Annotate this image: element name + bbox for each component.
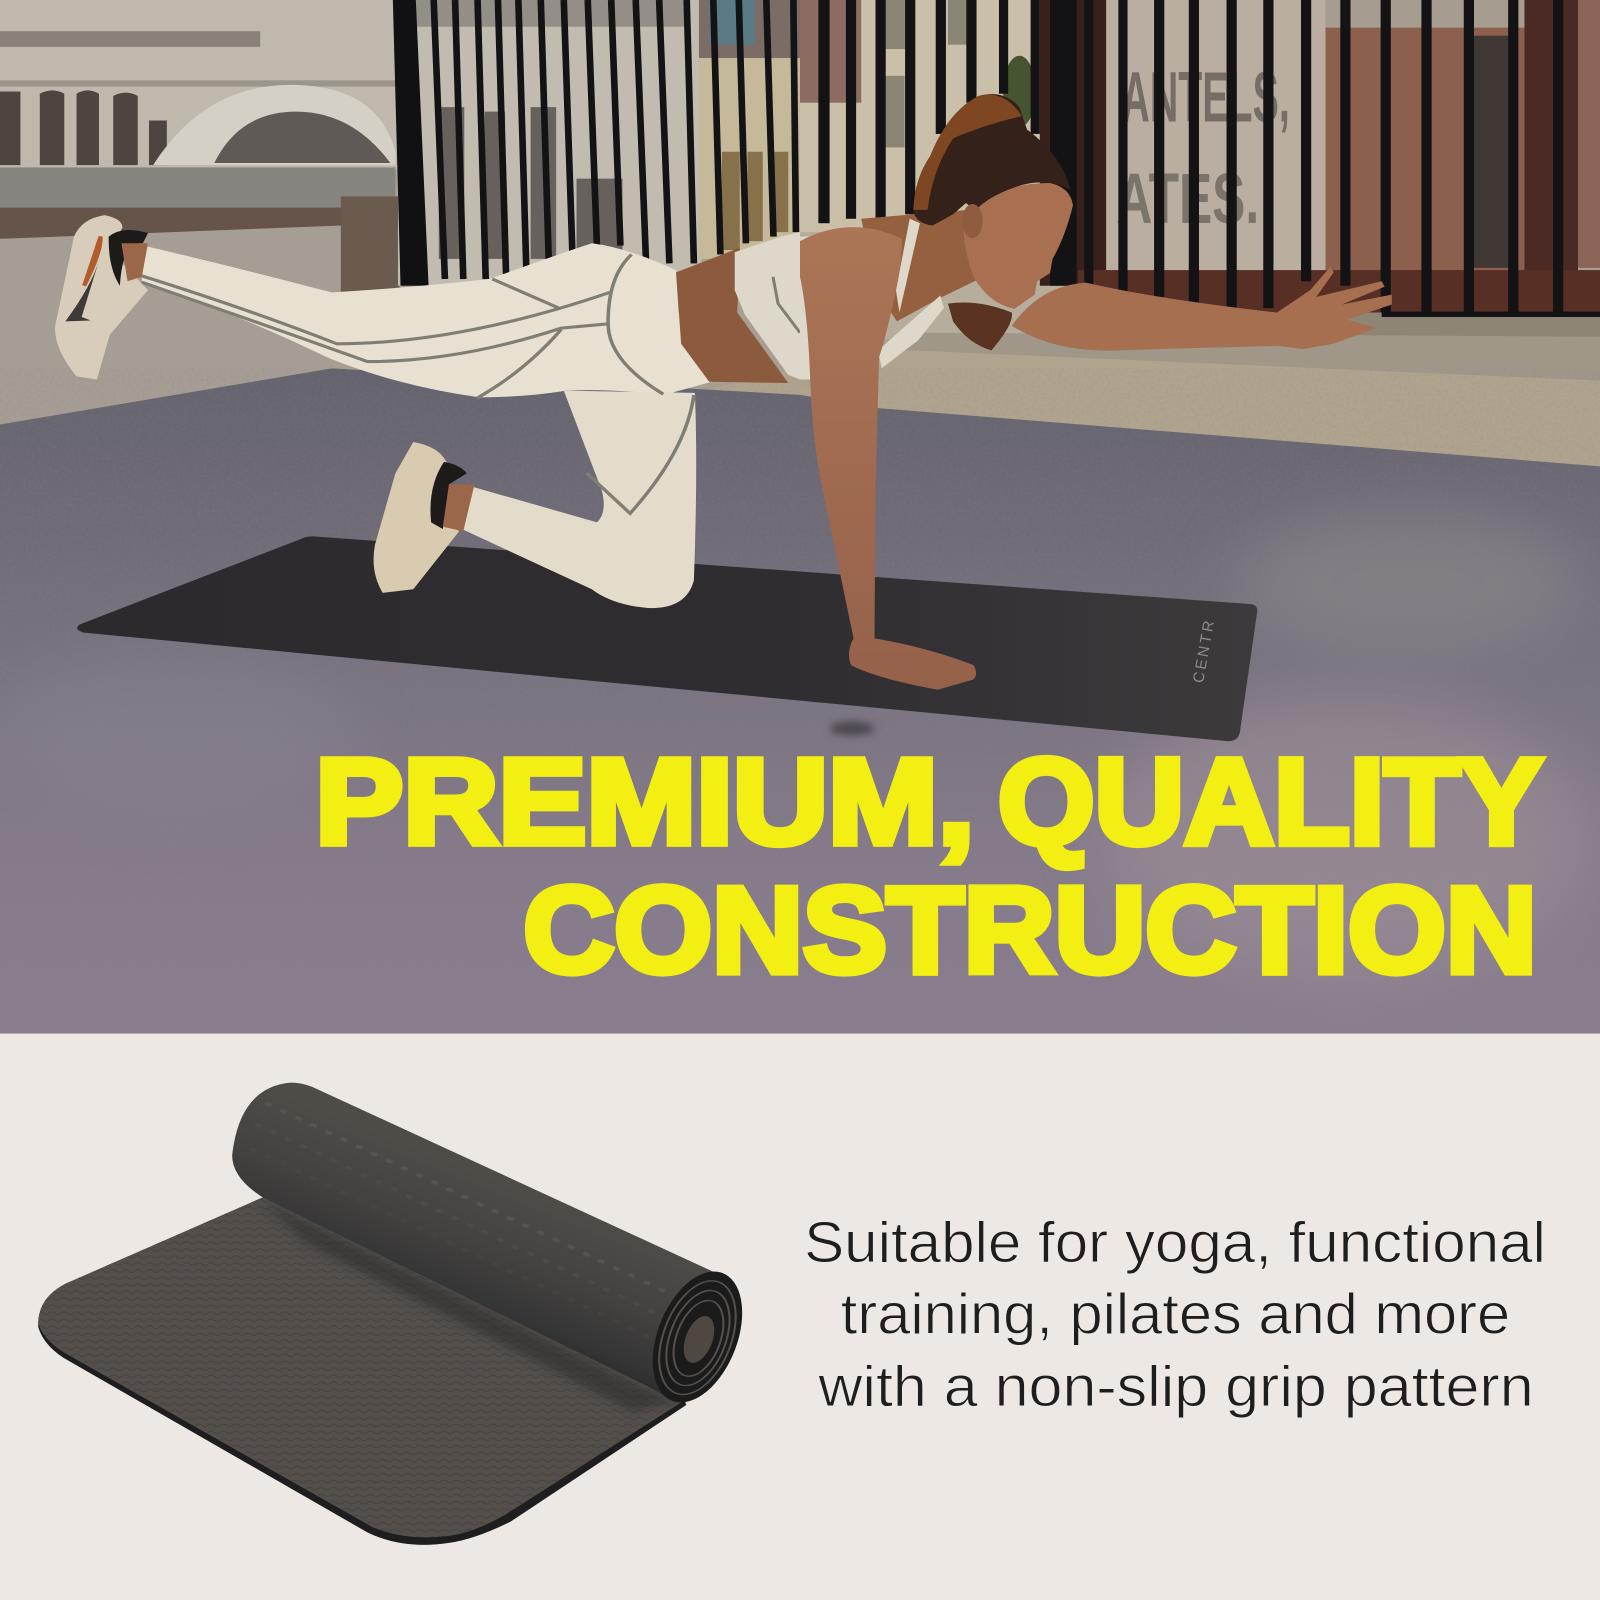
- extended arm and hand: [1012, 267, 1392, 351]
- raised shoe: [55, 215, 148, 379]
- midriff and sports bra back: [676, 232, 800, 383]
- headline: [315, 733, 1543, 998]
- kneeling shoe: [374, 442, 459, 593]
- headline: QUALITY: [998, 733, 1543, 869]
- ground: [0, 368, 1600, 1034]
- kneeling leg: [462, 391, 696, 608]
- bra front: [896, 219, 920, 312]
- background: brick wall and fence, right half: ANTELS,: [1121, 58, 1290, 137]
- roll grip texture: [250, 1103, 673, 1341]
- headline: PREMIUM,: [315, 733, 974, 869]
- panel: product section background: [0, 1034, 1600, 1600]
- background: street and fence, left half: [0, 0, 801, 426]
- hair and ponytail: [913, 94, 1070, 225]
- low concrete wall: [714, 333, 1600, 467]
- figure: legs and shoes: [55, 215, 712, 608]
- flat mat edge: [38, 1200, 686, 1545]
- yoga mat in use: [77, 536, 1257, 741]
- raised leg and hips: [142, 243, 712, 397]
- supporting arm and hand: [800, 227, 976, 690]
- headline: CONSTRUCTION: [523, 862, 1537, 998]
- caption text: [804, 1211, 1546, 1419]
- caption text: with a non-slip grip pattern: [817, 1355, 1534, 1419]
- ear: [962, 204, 983, 238]
- mat logo: CENTR: [1190, 617, 1218, 684]
- background: brick wall and fence, right half: [800, 0, 1600, 339]
- product: rolled yoga mat: [38, 1083, 758, 1545]
- face: [963, 183, 1073, 309]
- caption text: Suitable for yoga, functional: [804, 1211, 1546, 1275]
- roll end: [637, 1266, 758, 1408]
- caption text: training, pilates and more: [841, 1283, 1510, 1347]
- panel: lifestyle photo: [0, 0, 1600, 1034]
- roll contact shadow: [260, 1199, 679, 1411]
- leg seams: [142, 254, 694, 513]
- roll body: [232, 1083, 719, 1396]
- figure: torso, arms and head: [676, 94, 1392, 690]
- flat mat surface: [38, 1197, 684, 1537]
- background: brick wall and fence, right half: ATES.: [1116, 160, 1259, 239]
- neck and chest: [861, 210, 984, 321]
- back hair: [948, 302, 1012, 350]
- photo base tone: [0, 0, 1600, 469]
